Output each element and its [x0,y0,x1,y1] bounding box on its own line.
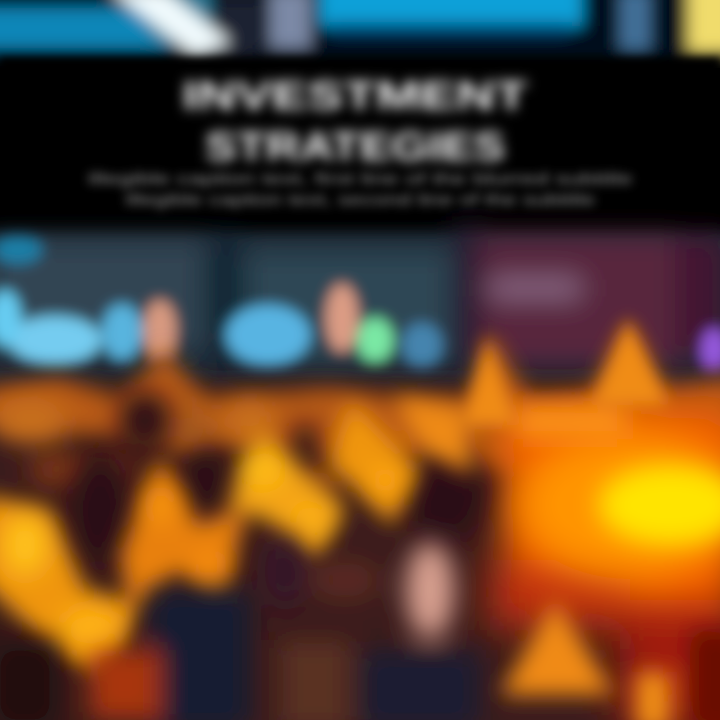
lower audience [0,534,480,720]
panel: black title band [0,58,720,224]
heading: INVESTMENT [182,74,528,118]
orange zigzag flame blobs [0,395,472,675]
heading: STRATEGIES [205,125,505,169]
panel: middle stage screens [0,225,720,402]
small fires at the bottom right [500,600,720,720]
dark crowd silhouettes [72,392,485,565]
panel: top photo strip [0,0,720,60]
panel: crowd and flames [0,318,720,720]
subtitle text: Illegible caption text, second line of the subtitle [125,192,595,209]
large fire on the right [490,410,720,720]
flame tops along the crowd line [0,325,720,470]
subtitle text: Illegible caption text, first line of the blurred subtitle [88,171,633,188]
subtitle text [88,171,633,209]
heading [182,74,528,169]
mottled crowd band [0,398,342,498]
